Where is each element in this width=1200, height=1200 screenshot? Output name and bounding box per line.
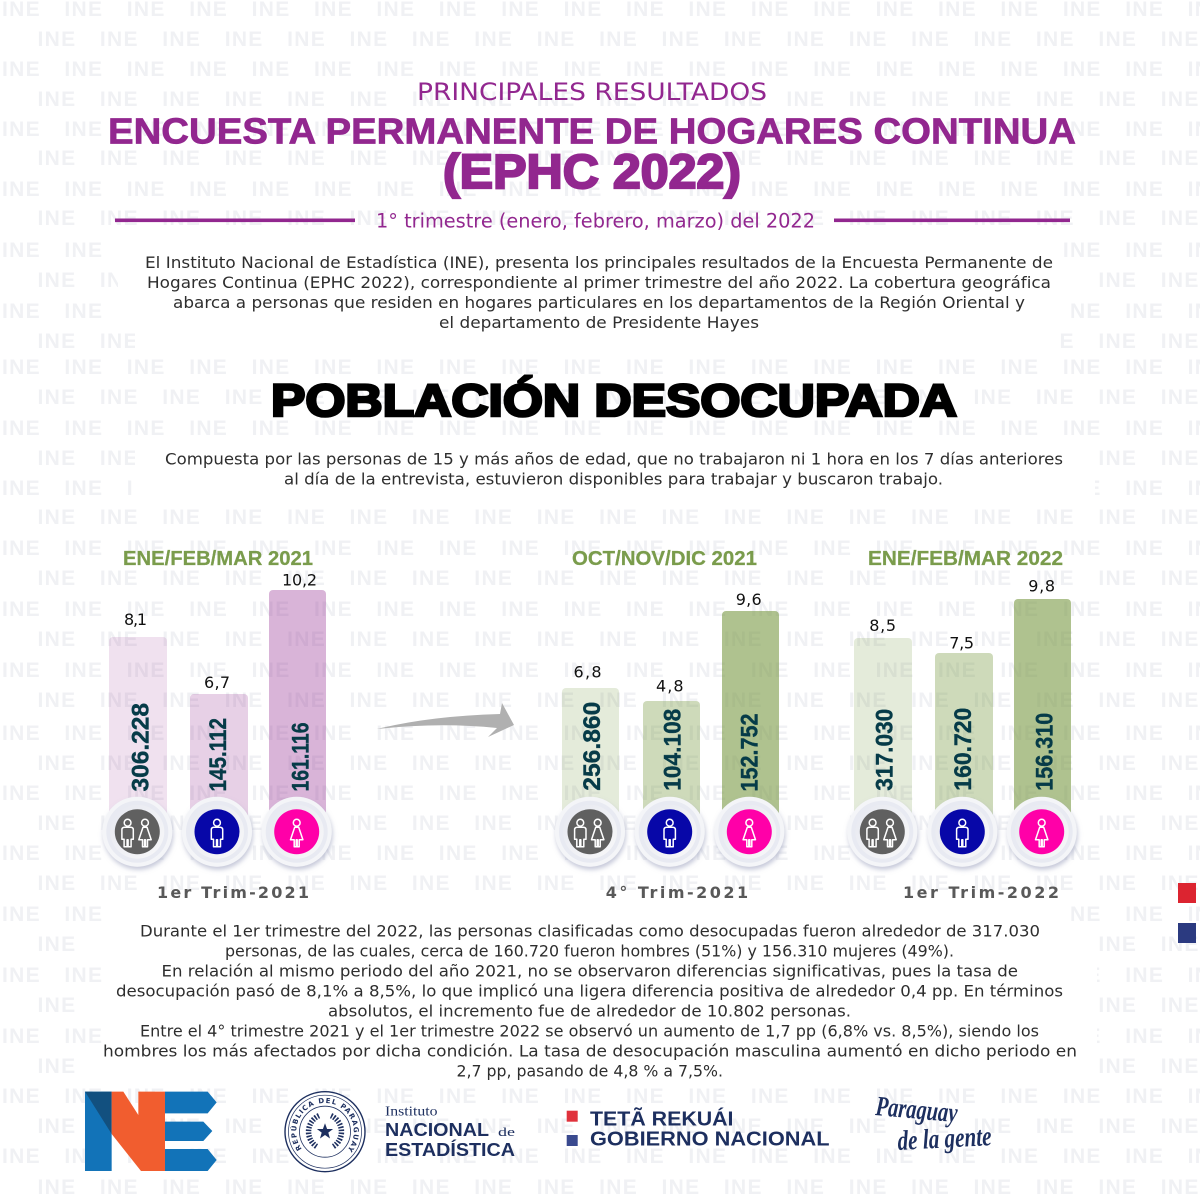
- panel: ene/feb/mar 2022: [847, 548, 1077, 902]
- logo: Tetã Rekuái Gobierno Nacional: TETÃ REKUÁI: [590, 1108, 734, 1131]
- text: INE INE INE INE INE INE INE INE INE INE INE INE INE INE INE INE INE INE INE: [38, 994, 1200, 1017]
- analysis paragraph: 2,7 pp, pasando de 4,8 % a 7,5%.: [456, 1062, 723, 1080]
- bar: total 2021 q1: [109, 610, 167, 832]
- text: INE INE INE INE INE INE INE INE INE INE INE INE INE INE INE INE INE INE INE INE: [2, 782, 1200, 805]
- bar: total 2022 q1: [854, 616, 912, 832]
- text: INE INE INE INE INE INE INE INE INE INE INE INE INE INE INE INE INE INE INE: [38, 28, 1200, 51]
- text: INE INE INE INE INE INE INE INE INE INE INE INE INE INE INE INE INE INE INE INE: [2, 356, 1200, 379]
- heading: principales resultados: PRINCIPALES RESULTADOS: [417, 78, 767, 106]
- text: INE INE INE INE INE INE INE INE INE INE INE INE INE INE INE INE INE INE INE: [38, 386, 1200, 409]
- text: INE INE INE INE INE INE INE INE INE INE INE INE INE INE INE INE INE INE INE INE: [2, 659, 1200, 682]
- title: ENCUESTA PERMANENTE DE HOGARES CONTINUA: [108, 110, 1076, 152]
- logo text: Instituto Nacional de Estadística: Instituto: [385, 1104, 438, 1120]
- text: INE INE INE INE INE INE INE INE INE INE INE INE INE INE INE INE INE INE INE INE: [2, 964, 1200, 987]
- logo: Paraguay de la gente: de la gente: [897, 1121, 992, 1157]
- logo: Tetã Rekuái Gobierno Nacional: [567, 1108, 830, 1151]
- period footer 2022 q1: 1er Trim-2022: [903, 883, 1059, 902]
- analysis paragraph: absolutos, el incremento fue de alrededor de 10.802 personas.: [328, 1002, 851, 1020]
- section heading: población desocupada: POBLACIÓN DESOCUPADA: [271, 375, 957, 426]
- period footer 2021 q1: 1er Trim-2021: [157, 883, 309, 902]
- icon: ambos sexos: [847, 797, 917, 867]
- text: INE INE INE INE INE INE INE INE INE INE INE INE INE INE INE INE INE INE INE: [38, 689, 1200, 712]
- title: [108, 110, 1076, 199]
- bar: mujeres 2022 q1: 156.310: [1032, 713, 1059, 791]
- bar: mujeres 2021 q4: 152.752: [737, 714, 764, 792]
- bar: mujeres 2021 q4: [722, 590, 779, 832]
- intro paragraph: [145, 253, 1053, 332]
- text: INE INE INE INE INE INE INE INE INE INE INE INE INE INE INE INE INE INE INE INE: [2, 1085, 1200, 1108]
- bar: total 2022 q1: 317.030: [871, 709, 898, 791]
- bar: hombres 2022 q1: 7,5: [949, 633, 974, 652]
- bar: hombres 2021 q4: 104.108: [660, 709, 686, 791]
- text: INE INE INE INE INE INE INE INE INE INE INE INE INE INE INE INE INE INE INE INE: [2, 118, 1200, 141]
- analysis paragraph: Durante el 1er trimestre del 2022, las personas clasificadas como desocupadas fueron alrededor de 317.030: [140, 922, 1040, 940]
- text: INE INE INE INE INE INE INE INE INE INE INE INE INE INE INE INE INE INE INE: [38, 628, 1200, 651]
- icon: hombres: [182, 797, 252, 867]
- intro paragraph: El Instituto Nacional de Estadística (INE), presenta los principales resultados de la Encuesta Permanente de: [145, 253, 1053, 272]
- icon: mujeres: [262, 797, 332, 867]
- bar: total 2021 q4: [562, 662, 619, 832]
- icon: mujeres: [1007, 797, 1077, 867]
- text: INE INE INE INE INE INE INE INE INE INE INE INE INE INE INE INE INE INE INE INE: [2, 58, 1200, 81]
- text: INE INE INE INE INE INE INE INE INE INE INE INE INE INE INE INE INE INE INE INE: [2, 1145, 1200, 1168]
- bar: total 2021 q1: 306.228: [127, 703, 154, 792]
- subtitle with side rules: 1° trimestre (enero, febrero, marzo) del 2022: [376, 210, 815, 232]
- bar: hombres 2021 q4: 4,8: [656, 676, 684, 696]
- text: INE INE INE INE INE INE INE INE INE INE INE INE INE INE INE INE INE INE INE: [38, 933, 1200, 956]
- analysis paragraph: desocupación pasó de 8,1% a 8,5%, lo que implicó una ligera diferencia positiva de alrededor 0,4 pp. En términos: [116, 982, 1063, 1000]
- bar: hombres 2021 q4: [643, 676, 700, 832]
- text: INE INE INE INE INE INE INE INE INE INE INE INE INE INE INE INE INE INE INE INE: [2, 477, 1200, 500]
- logo: national seal: [284, 1091, 366, 1172]
- analysis paragraph: [103, 922, 1077, 1080]
- text: INE INE INE INE INE INE INE INE INE INE INE INE INE INE INE INE INE INE INE INE: [2, 537, 1200, 560]
- text: INE INE INE INE INE INE INE INE INE INE INE INE INE INE INE INE INE INE INE: [38, 1055, 1200, 1078]
- text: INE INE INE INE INE INE INE INE INE INE INE INE INE INE INE INE INE INE INE: [38, 1115, 1200, 1138]
- title: (EPHC 2022): [443, 146, 741, 199]
- text: INE INE INE INE INE INE INE INE INE INE INE INE INE INE INE INE INE INE INE: [38, 567, 1200, 590]
- text: INE INE INE INE INE INE INE INE INE INE INE INE INE INE INE INE INE INE INE: [38, 88, 1200, 111]
- text: INE INE INE INE INE INE INE INE INE INE INE INE INE INE INE INE INE INE INE: [38, 207, 1200, 230]
- intro paragraph: el departamento de Presidente Hayes: [439, 313, 759, 332]
- bar: total 2022 q1: 8,5: [869, 616, 896, 635]
- text: INE INE INE INE INE INE INE INE INE INE INE INE INE INE INE INE INE INE INE INE: [2, 722, 1200, 745]
- bar: hombres 2021 q1: [190, 673, 248, 832]
- logo text: Instituto Nacional de Estadística: de: [498, 1124, 515, 1139]
- bar: mujeres 2022 q1: [1014, 577, 1071, 832]
- text: INE INE INE INE INE INE INE INE INE INE INE INE INE INE INE INE INE INE INE: [38, 1176, 1200, 1199]
- intro paragraph: abarca a personas que residen en hogares particulares en los departamentos de la Región Oriental y: [173, 293, 1025, 312]
- bar: mujeres 2021 q1: [269, 570, 326, 832]
- text: INE INE INE INE INE INE INE INE INE INE INE INE INE INE INE INE INE INE INE: [38, 506, 1200, 529]
- bar: mujeres 2021 q4: 9,6: [736, 590, 762, 609]
- text: INE INE INE INE INE INE INE INE INE INE INE INE INE INE INE INE INE INE INE: [38, 872, 1200, 895]
- period footer 2021 q4: 4° Trim-2021: [606, 883, 748, 902]
- bar: total 2021 q4: 256.860: [579, 702, 606, 791]
- bar: hombres 2021 q1: 145.112: [205, 718, 232, 792]
- icon: hombres: [927, 797, 997, 867]
- definition paragraph: [165, 450, 1063, 488]
- bar: hombres 2022 q1: [935, 633, 993, 832]
- icon: ambos sexos: [555, 797, 625, 867]
- bar: total 2021 q4: 6,8: [574, 662, 602, 682]
- text: INE INE INE INE INE INE INE INE INE INE INE INE INE INE INE INE INE INE INE: [38, 752, 1200, 775]
- text: INE INE INE INE INE INE INE INE INE INE INE INE INE INE INE INE INE INE INE INE: [2, 903, 1200, 926]
- text: INE INE INE INE INE INE INE INE INE INE INE INE INE INE INE INE INE INE INE INE: [2, 300, 1200, 323]
- panel: oct/nov/dic 2021: [555, 548, 784, 902]
- logo text: Instituto Nacional de Estadística: [385, 1104, 515, 1160]
- text: INE INE INE INE INE INE INE INE INE INE INE INE INE INE INE INE INE INE INE: [38, 269, 1200, 292]
- text: INE INE INE INE INE INE INE INE INE INE INE INE INE INE INE INE INE INE INE INE: [2, 1025, 1200, 1048]
- logo text: Instituto Nacional de Estadística: NACIONAL: [385, 1120, 489, 1140]
- analysis paragraph: En relación al mismo periodo del año 2021, no se observaron diferencias significativas, pues la tasa de: [162, 962, 1018, 980]
- bar: hombres 2021 q1: 6,7: [204, 673, 230, 692]
- logo text: Instituto Nacional de Estadística: ESTADÍSTICA: [385, 1139, 515, 1160]
- logo: INE: [85, 1092, 217, 1171]
- panel: ene/feb/mar 2021: [102, 548, 332, 902]
- text: INE INE INE INE INE INE INE INE INE INE INE INE INE INE INE INE INE INE INE: [38, 812, 1200, 835]
- definition paragraph: al día de la entrevista, estuvieron disponibles para trabajar y buscaron trabajo.: [284, 470, 943, 488]
- text: INE INE INE INE INE INE INE INE INE INE INE INE INE INE INE INE INE INE INE INE: [2, 598, 1200, 621]
- period heading 2021 q4: OCT/NOV/DIC 2021: [572, 548, 757, 570]
- bar: mujeres 2021 q1: 10,2: [282, 570, 317, 590]
- bar: hombres 2022 q1: 160.720: [950, 708, 977, 791]
- logo: national seal: REPÚBLICA DEL PARAGUAY: [290, 1098, 359, 1153]
- definition paragraph: Compuesta por las personas de 15 y más años de edad, que no trabajaron ni 1 hora en los 7 días anteriores: [165, 450, 1063, 468]
- text: INE INE INE INE INE INE INE INE INE INE INE INE INE INE INE INE INE INE INE INE: [2, 239, 1200, 262]
- arrow: [377, 703, 514, 737]
- text: INE INE INE INE INE INE INE INE INE INE INE INE INE INE INE INE INE INE INE: [38, 330, 1200, 353]
- text: INE INE INE INE INE INE INE INE INE INE INE INE INE INE INE INE INE INE INE INE: [2, 417, 1200, 440]
- icon: ambos sexos: [102, 797, 172, 867]
- subtitle with side rules: [115, 210, 1070, 232]
- intro paragraph: Hogares Continua (EPHC 2022), correspondiente al primer trimestre del año 2022. La cobertura geográfica: [147, 273, 1051, 292]
- text: INE INE INE INE INE INE INE INE INE INE INE INE INE INE INE INE INE INE INE: [38, 147, 1200, 170]
- icon: hombres: [635, 797, 705, 867]
- analysis paragraph: Entre el 4° trimestre 2021 y el 1er trimestre 2022 se observó un aumento de 1,7 pp (6,8% vs. 8,5%), siendo los: [140, 1022, 1039, 1040]
- text: INE INE INE INE INE INE INE INE INE INE INE INE INE INE INE INE INE INE INE INE: [2, 178, 1200, 201]
- bar: mujeres 2021 q1: 161.116: [287, 722, 314, 792]
- period heading 2021 q1: ENE/FEB/MAR 2021: [123, 548, 313, 570]
- logo: Tetã Rekuái Gobierno Nacional: GOBIERNO NACIONAL: [590, 1128, 830, 1151]
- side flag squares: [1178, 883, 1196, 943]
- logo: Paraguay de la gente: Paraguay: [874, 1091, 959, 1129]
- analysis paragraph: personas, de las cuales, cerca de 160.720 fueron hombres (51%) y 156.310 mujeres (49%).: [225, 942, 954, 960]
- period heading 2022 q1: ENE/FEB/MAR 2022: [868, 548, 1063, 570]
- icon: mujeres: [714, 797, 784, 867]
- bar: total 2021 q1: 8,1: [124, 610, 147, 629]
- bar: mujeres 2022 q1: 9,8: [1028, 577, 1055, 596]
- logo: Paraguay de la gente: [874, 1091, 992, 1157]
- analysis paragraph: hombres los más afectados por dicha condición. La tasa de desocupación masculina aumentó en dicho periodo en: [103, 1042, 1077, 1060]
- text: INE INE INE INE INE INE INE INE INE INE INE INE INE INE INE INE INE INE INE INE: [2, 842, 1200, 865]
- text: INE INE INE INE INE INE INE INE INE INE INE INE INE INE INE INE INE INE INE: [38, 447, 1200, 470]
